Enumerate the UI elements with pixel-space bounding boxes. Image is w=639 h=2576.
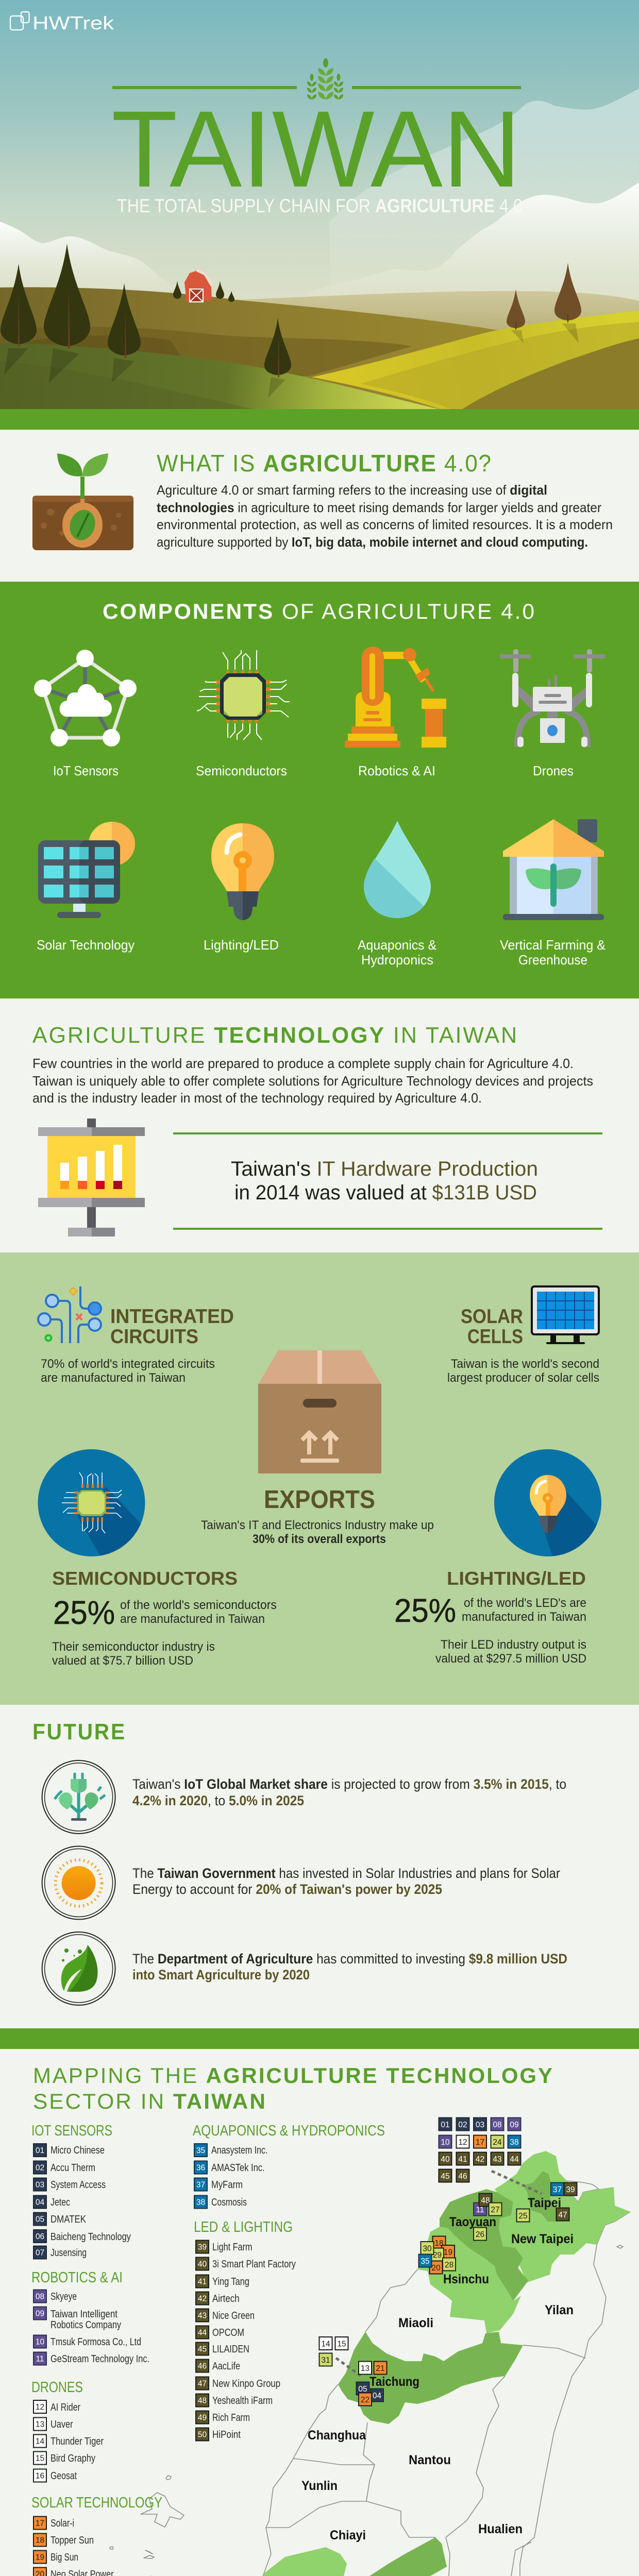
legend: aquaponics and hydroponics: 36 [196,2164,205,2172]
legend: drones: DRONES [31,2379,83,2396]
legend: aquaponics and hydroponics: Anasystem Inc. [211,2145,268,2156]
title: TAIWAN [111,88,521,210]
body text [32,1056,593,1106]
islands [617,2245,623,2248]
outline and county borders [110,2181,630,2576]
icon labels: Drones [533,763,574,778]
legend: robotics and AI: 09 [36,2309,44,2318]
map markers: Taoyuan cluster: 27 [491,2206,500,2214]
block: lighting/LED [394,1568,586,1666]
legend: robotics and AI: 08 [36,2293,44,2301]
legend: IoT sensors: DMATEK [51,2214,87,2225]
text: solar investment [132,1866,560,1897]
legend: robotics and AI: 10 [36,2338,44,2346]
legend: drones: Uaver [51,2419,73,2430]
legend: IoT sensors: Micro Chinese [51,2145,105,2156]
text: exports: 30% of its overall exports [253,1532,386,1546]
legend: LED and lighting, column two: 45 [198,2345,207,2353]
map markers: Taipei cluster: 02 [458,2121,467,2129]
body text: environmental protection, as well as concerns of limited resources. It is a modern [157,517,613,532]
icon: water drop [364,821,431,918]
legend: LED and lighting, column two: LED & LIGHTING [194,2219,293,2235]
dotted leader lines [251,2171,542,2576]
icon: bulb in blue circle [494,1449,608,1561]
heading: components: COMPONENTS OF AGRICULTURE 4.0 [103,599,536,623]
county labels: Miaoli [398,2316,433,2330]
map markers: Hsinchu cluster: 19 [444,2248,452,2257]
text: integrated circuits: are manufactured in Taiwan [41,1371,186,1385]
block: lighting/LED: manufactured in Taiwan [462,1610,586,1624]
legend: IoT sensors: 03 [36,2180,44,2190]
icon: robot arm [345,647,446,748]
text: solar cells [447,1357,599,1385]
brown hill [0,287,639,412]
legend: LED and lighting, column two: 43 [198,2311,207,2320]
legend: LED and lighting, column two: Rich Farm [212,2412,250,2424]
text: IoT market share [132,1776,566,1808]
map markers: Taipei cluster: 39 [566,2185,575,2194]
county labels: Yunlin [301,2479,338,2493]
legend: robotics and AI: Robotics Company [51,2319,121,2331]
icon: wheat [307,58,343,99]
legend: IoT sensors: Accu Therm [51,2162,95,2174]
text: IoT market share: Taiwan's IoT Global Market share is projected to grow from 3.5% in 2015, to [132,1776,566,1792]
legend: LED and lighting, column two: 46 [198,2362,207,2371]
section: future [32,1719,567,2005]
legend: IoT sensors: 01 [36,2146,44,2155]
map markers: Taichung cluster: 15 [337,2340,346,2348]
map markers: Taichung cluster [320,2337,386,2406]
map markers: Taipei cluster: 25 [518,2212,528,2221]
county labels: Taoyuan [449,2215,496,2229]
icon: drone [500,649,605,747]
legend: IoT sensors: Jusensing [51,2247,87,2259]
icon: solar technology [38,822,135,918]
body text: Taiwan is uniquely able to offer complete solutions for Agriculture Technology devices and projects [32,1073,593,1089]
legend: LED and lighting, column two: Yeshealth iFarm [212,2395,273,2406]
heading: exports: EXPORTS [264,1486,375,1514]
legend: drones: Bird Graphy [51,2453,95,2464]
green band [0,409,639,430]
body text: technologies in agriculture to meet rising demands for larger yields and greater [157,500,601,515]
map markers: Hsinchu cluster: 20 [431,2264,441,2273]
map markers: Taipei cluster: 01 [441,2121,450,2129]
left cloud [0,222,191,299]
region: Kaohsiung [277,2537,447,2576]
county labels: Changhua [308,2428,366,2443]
map markers: Taipei cluster [439,2117,577,2222]
far hill [237,291,639,371]
body text: and is the industry leader in most of the technology required by Agriculture 4.0. [32,1090,482,1106]
icon: solar cell panel [532,1286,599,1344]
green band [0,2028,639,2049]
legend: drones: 15 [36,2454,44,2463]
map markers: Hsinchu cluster [418,2236,456,2274]
icon: greenhouse [503,819,604,920]
map markers: Taipei cluster: 43 [493,2155,502,2164]
map markers: Taipei cluster: 12 [458,2138,467,2147]
block: lighting/LED: valued at $297.5 million USD [435,1652,586,1666]
county labels: Nantou [409,2453,451,2467]
icon: chip in blue circle [38,1449,149,1561]
map markers: Taipei cluster: 40 [441,2155,450,2164]
section: what is agriculture 4.0 [32,450,613,550]
map markers: Hsinchu cluster: 29 [433,2251,442,2260]
icon labels: Semiconductors [196,763,287,778]
legend: IoT sensors: 07 [36,2248,44,2258]
text: solar investment: The Taiwan Government has invested in Solar Industries and plans for Solar [132,1866,560,1881]
region: Taichung [338,2332,523,2424]
heading: integrated circuits [110,1306,234,1348]
map markers: Taoyuan cluster: 48 [481,2196,490,2205]
map markers: Taipei cluster: 44 [510,2155,519,2164]
legend: solar technology [31,2495,162,2576]
block: lighting/LED: 25% [394,1592,456,1629]
legend: solar technology: Solar-i [51,2518,74,2529]
trees [1,244,291,375]
text: integrated circuits: 70% of world's integrated circuits [41,1357,215,1371]
yellow hill [312,311,639,410]
legend: solar technology: 17 [36,2519,44,2528]
legend: LED and lighting, column two: New Kinpo Group [212,2378,280,2389]
map markers: Taipei cluster: 24 [493,2138,502,2147]
callout: IT hardware production [173,1132,602,1230]
legend: aquaponics and hydroponics: AQUAPONICS & HYDROPONICS [193,2123,385,2139]
map markers: Taichung cluster: 13 [361,2364,369,2373]
hero landscape [0,0,639,412]
tree shadows [4,324,579,398]
dark hill lower right [461,338,639,410]
legend: IoT sensors: 05 [36,2215,44,2224]
text: integrated circuits [41,1357,215,1385]
legend: LED and lighting, column two: LILAIDEN [212,2344,249,2355]
icon labels: IoT Sensors [53,763,119,778]
heading: future: FUTURE [32,1719,126,1744]
heading: mapping: MAPPING THE AGRICULTURE TECHNOLOGY [33,2063,554,2088]
icon: IoT sensors [34,650,137,747]
icon labels: Aquaponics & [358,937,436,953]
legend: robotics and AI: GeStream Technology Inc. [51,2353,149,2365]
legend: robotics and AI [31,2269,149,2365]
map markers: Hsinchu cluster: 18 [434,2239,444,2248]
heading: integrated circuits: CIRCUITS [110,1326,198,1348]
body text [157,482,613,550]
text: department of agriculture: into Smart Agriculture by 2020 [132,1967,310,1982]
map markers: Taichung cluster: 14 [321,2340,330,2348]
text: solar investment: Energy to account for 20% of Taiwan's power by 2025 [132,1882,442,1897]
legend: robotics and AI: Skyeye [51,2291,77,2302]
legend: LED and lighting, column two: HiPoint [212,2429,241,2441]
map markers: Taipei cluster: 47 [558,2211,567,2219]
icon: light bulb [211,823,274,920]
map of Taiwan [110,2117,630,2576]
legend: aquaponics and hydroponics: MyFarm [211,2179,243,2191]
map markers: Taipei cluster: 03 [476,2121,484,2129]
legend: LED and lighting, column two: 44 [198,2329,207,2337]
block: lighting/LED: of the world's LED's are [464,1596,586,1610]
legend: LED and lighting, column two: 39 [198,2243,207,2251]
logo: HWTrek header [10,12,114,33]
icon: leaf [42,1932,115,2005]
county labels: Chiayi [330,2528,366,2543]
legend: LED and lighting, column two: 48 [198,2397,207,2405]
legend: drones [31,2379,104,2482]
map markers: Taipei cluster: 37 [553,2185,562,2194]
map markers: Taipei cluster: 17 [476,2138,484,2147]
county labels: New Taipei [511,2232,574,2246]
legend: solar technology: 18 [36,2536,44,2545]
legend: robotics and AI: 11 [36,2354,44,2364]
body text: Few countries in the world are prepared to produce a complete supply chain for Agriculture 4.0. [32,1056,574,1071]
legend: robotics and AI: Taiwan Intelligent [51,2309,117,2320]
region: New Taipei [495,2151,630,2282]
heading: WHAT IS AGRICULTURE 4.0? [157,450,492,477]
map markers: Taipei cluster: 46 [458,2172,467,2181]
map markers: Hsinchu cluster: 30 [423,2244,432,2253]
legend: drones: 13 [36,2420,44,2429]
legend: LED and lighting, column two: Airtech [212,2293,240,2304]
text: exports: Taiwan's IT and Electronics Industry make up [201,1518,434,1532]
legend: LED and lighting, column two [194,2219,296,2441]
icon: sun [42,1846,115,1920]
map markers: Taipei cluster: 41 [458,2155,467,2164]
legend: aquaponics and hydroponics: Cosmosis [211,2197,247,2208]
block: semiconductors: valued at $75.7 billion USD [52,1654,193,1668]
map markers: Taipei cluster: 38 [510,2138,519,2147]
legend: LED and lighting, column two: 49 [198,2413,207,2422]
heading: mapping [33,2063,554,2113]
map markers: Taipei cluster: 08 [493,2121,502,2129]
legend: IoT sensors: Baicheng Technology [51,2231,131,2243]
legend: aquaponics and hydroponics [193,2123,385,2208]
county labels: Yilan [545,2303,574,2317]
icon: cardboard box [258,1350,381,1473]
map markers: Taichung cluster: 05 [358,2385,367,2394]
heading: solar cells [461,1306,523,1348]
text: solar cells: largest producer of solar cells [447,1371,599,1385]
body text: agriculture supported by IoT, big data, mobile internet and cloud computing. [157,534,588,550]
county labels: Taichung [369,2375,419,2389]
block: semiconductors: Their semiconductor industry is [52,1640,215,1654]
block: semiconductors [52,1568,277,1668]
legend: robotics and AI: Tmsuk Formosa Co., Ltd [51,2336,141,2348]
callout: IT hardware production: in 2014 was valued at $131B USD [234,1181,537,1204]
logo: HWTrek header: HWTrek [32,12,114,33]
legend: IoT sensors: 02 [36,2164,44,2172]
legend: solar technology: SOLAR TECHNOLOGY [31,2495,162,2511]
legend: drones: AI Rider [51,2402,80,2413]
legend: aquaponics and hydroponics: 38 [196,2198,205,2207]
icon labels: Lighting/LED [204,937,279,953]
legend: drones: 16 [36,2472,44,2480]
legend: aquaponics and hydroponics: 37 [196,2180,205,2190]
heading: AGRICULTURE TECHNOLOGY IN TAIWAN [32,1023,518,1048]
text: IoT market share: 4.2% in 2020, to 5.0% in 2025 [132,1793,304,1808]
section: agriculture technology in Taiwan [32,1023,602,1236]
block: semiconductors: 25% [53,1594,115,1631]
map markers: Taipei cluster: 09 [510,2121,519,2129]
legend: LED and lighting, column two: Nice Green [212,2310,255,2321]
legend: solar technology: 19 [36,2553,44,2562]
legend: IoT sensors: 06 [36,2232,44,2241]
icon: semiconductor chip [197,650,290,740]
legend: IoT sensors: IOT SENSORS [31,2123,112,2139]
region: Hsinchu [417,2227,521,2333]
icon labels: Robotics & AI [358,763,435,778]
dark band [0,327,412,376]
icon labels [37,763,606,968]
legend: IoT sensors: Jetec [51,2197,70,2208]
legend: drones: 14 [36,2437,44,2446]
map markers: Taoyuan cluster [474,2194,502,2240]
map markers: Taoyuan cluster: 11 [476,2206,484,2214]
legend: LED and lighting, column two: Ying Tang [212,2276,249,2287]
heading: mapping: SECTOR IN TAIWAN [33,2089,267,2113]
text: exports [201,1518,434,1546]
legend: LED and lighting, column two: 3i Smart Plant Factory [212,2259,296,2270]
legend: drones: Geosat [51,2470,77,2482]
legend: robotics and AI: ROBOTICS & AI [31,2269,123,2286]
legend: IoT sensors: 04 [36,2198,44,2207]
county labels: Hsinchu [443,2272,489,2286]
map markers: Taichung cluster: 31 [321,2356,330,2365]
block: lighting/LED: LIGHTING/LED [447,1568,586,1589]
icon: integrated circuit [38,1286,101,1343]
map markers: Taipei cluster: 10 [441,2138,450,2147]
icon labels: Hydroponics [361,952,433,968]
text: department of agriculture [132,1951,567,1982]
region: Tainan [249,2547,369,2576]
map markers: Taichung cluster: 22 [361,2396,369,2404]
legend: IoT sensors [31,2123,131,2259]
map markers: Taichung cluster: 21 [376,2364,385,2373]
body text: Agriculture 4.0 or smart farming refers to the increasing use of digital [157,482,547,498]
panel: components [0,582,639,998]
icon labels: Solar Technology [37,937,134,953]
icon: presentation board [38,1118,145,1236]
icon labels: Greenhouse [518,952,587,968]
legend: aquaponics and hydroponics: AMASTek Inc. [211,2162,265,2174]
legend: LED and lighting, column two: 47 [198,2379,207,2388]
icon: sprout [32,453,133,550]
region: Taipei [523,2171,557,2222]
legend: LED and lighting, column two: 42 [198,2295,207,2303]
legend: LED and lighting, column two: 50 [198,2431,207,2439]
heading: integrated circuits: INTEGRATED [110,1306,234,1328]
map markers: Taipei cluster: 42 [476,2155,484,2164]
legend: LED and lighting, column two: AacLife [212,2361,240,2372]
callout: IT hardware production: Taiwan's IT Hardware Production [231,1158,538,1180]
legend: IoT sensors: System Access [51,2179,106,2191]
map markers: Taipei cluster: 45 [441,2172,450,2181]
map markers: Hsinchu cluster: 28 [445,2261,453,2269]
block: semiconductors: are manufactured in Taiwan [120,1612,265,1626]
legend: solar technology: Topper Sun [51,2535,94,2546]
text: department of agriculture: The Department of Agriculture has committed to investing $9.8 million USD [132,1951,567,1967]
green hill [0,343,443,410]
legend: LED and lighting, column two: OPCOM [212,2327,244,2338]
text: solar cells: Taiwan is the world's second [451,1357,599,1371]
block: lighting/LED: Their LED industry output is [441,1638,586,1652]
heading: solar cells: CELLS [467,1326,523,1348]
barn [184,270,212,302]
legend: LED and lighting, column two: 40 [198,2260,207,2269]
back cloud [330,89,639,309]
title rules [112,86,521,89]
county labels [293,2196,574,2576]
subtitle: THE TOTAL SUPPLY CHAIN FOR AGRICULTURE 4.0 [117,195,523,216]
county labels: Taipei [528,2196,561,2210]
legend: LED and lighting, column two: 41 [198,2277,207,2286]
heading: solar cells: SOLAR [461,1306,523,1328]
block: semiconductors: SEMICONDUCTORS [52,1568,238,1589]
county labels: Hualien [478,2522,523,2536]
region: Taoyuan [440,2189,528,2301]
legend: drones: 12 [36,2403,44,2412]
right cloud [297,182,639,309]
block: semiconductors: of the world's semiconductors [120,1598,277,1612]
legend: drones: Thunder Tiger [51,2436,104,2447]
map markers: Taoyuan cluster: 26 [476,2230,484,2239]
panel: exports [0,1252,639,1705]
legend: solar technology: Big Sun [51,2552,78,2563]
icon labels: Vertical Farming & [500,937,606,953]
icon: plug plant [42,1760,115,1834]
legend: aquaponics and hydroponics: 35 [196,2146,205,2155]
legend: LED and lighting, column two: Light Farm [212,2242,253,2253]
map markers: Taichung cluster: 04 [373,2392,381,2400]
map markers: Hsinchu cluster: 35 [421,2257,430,2266]
